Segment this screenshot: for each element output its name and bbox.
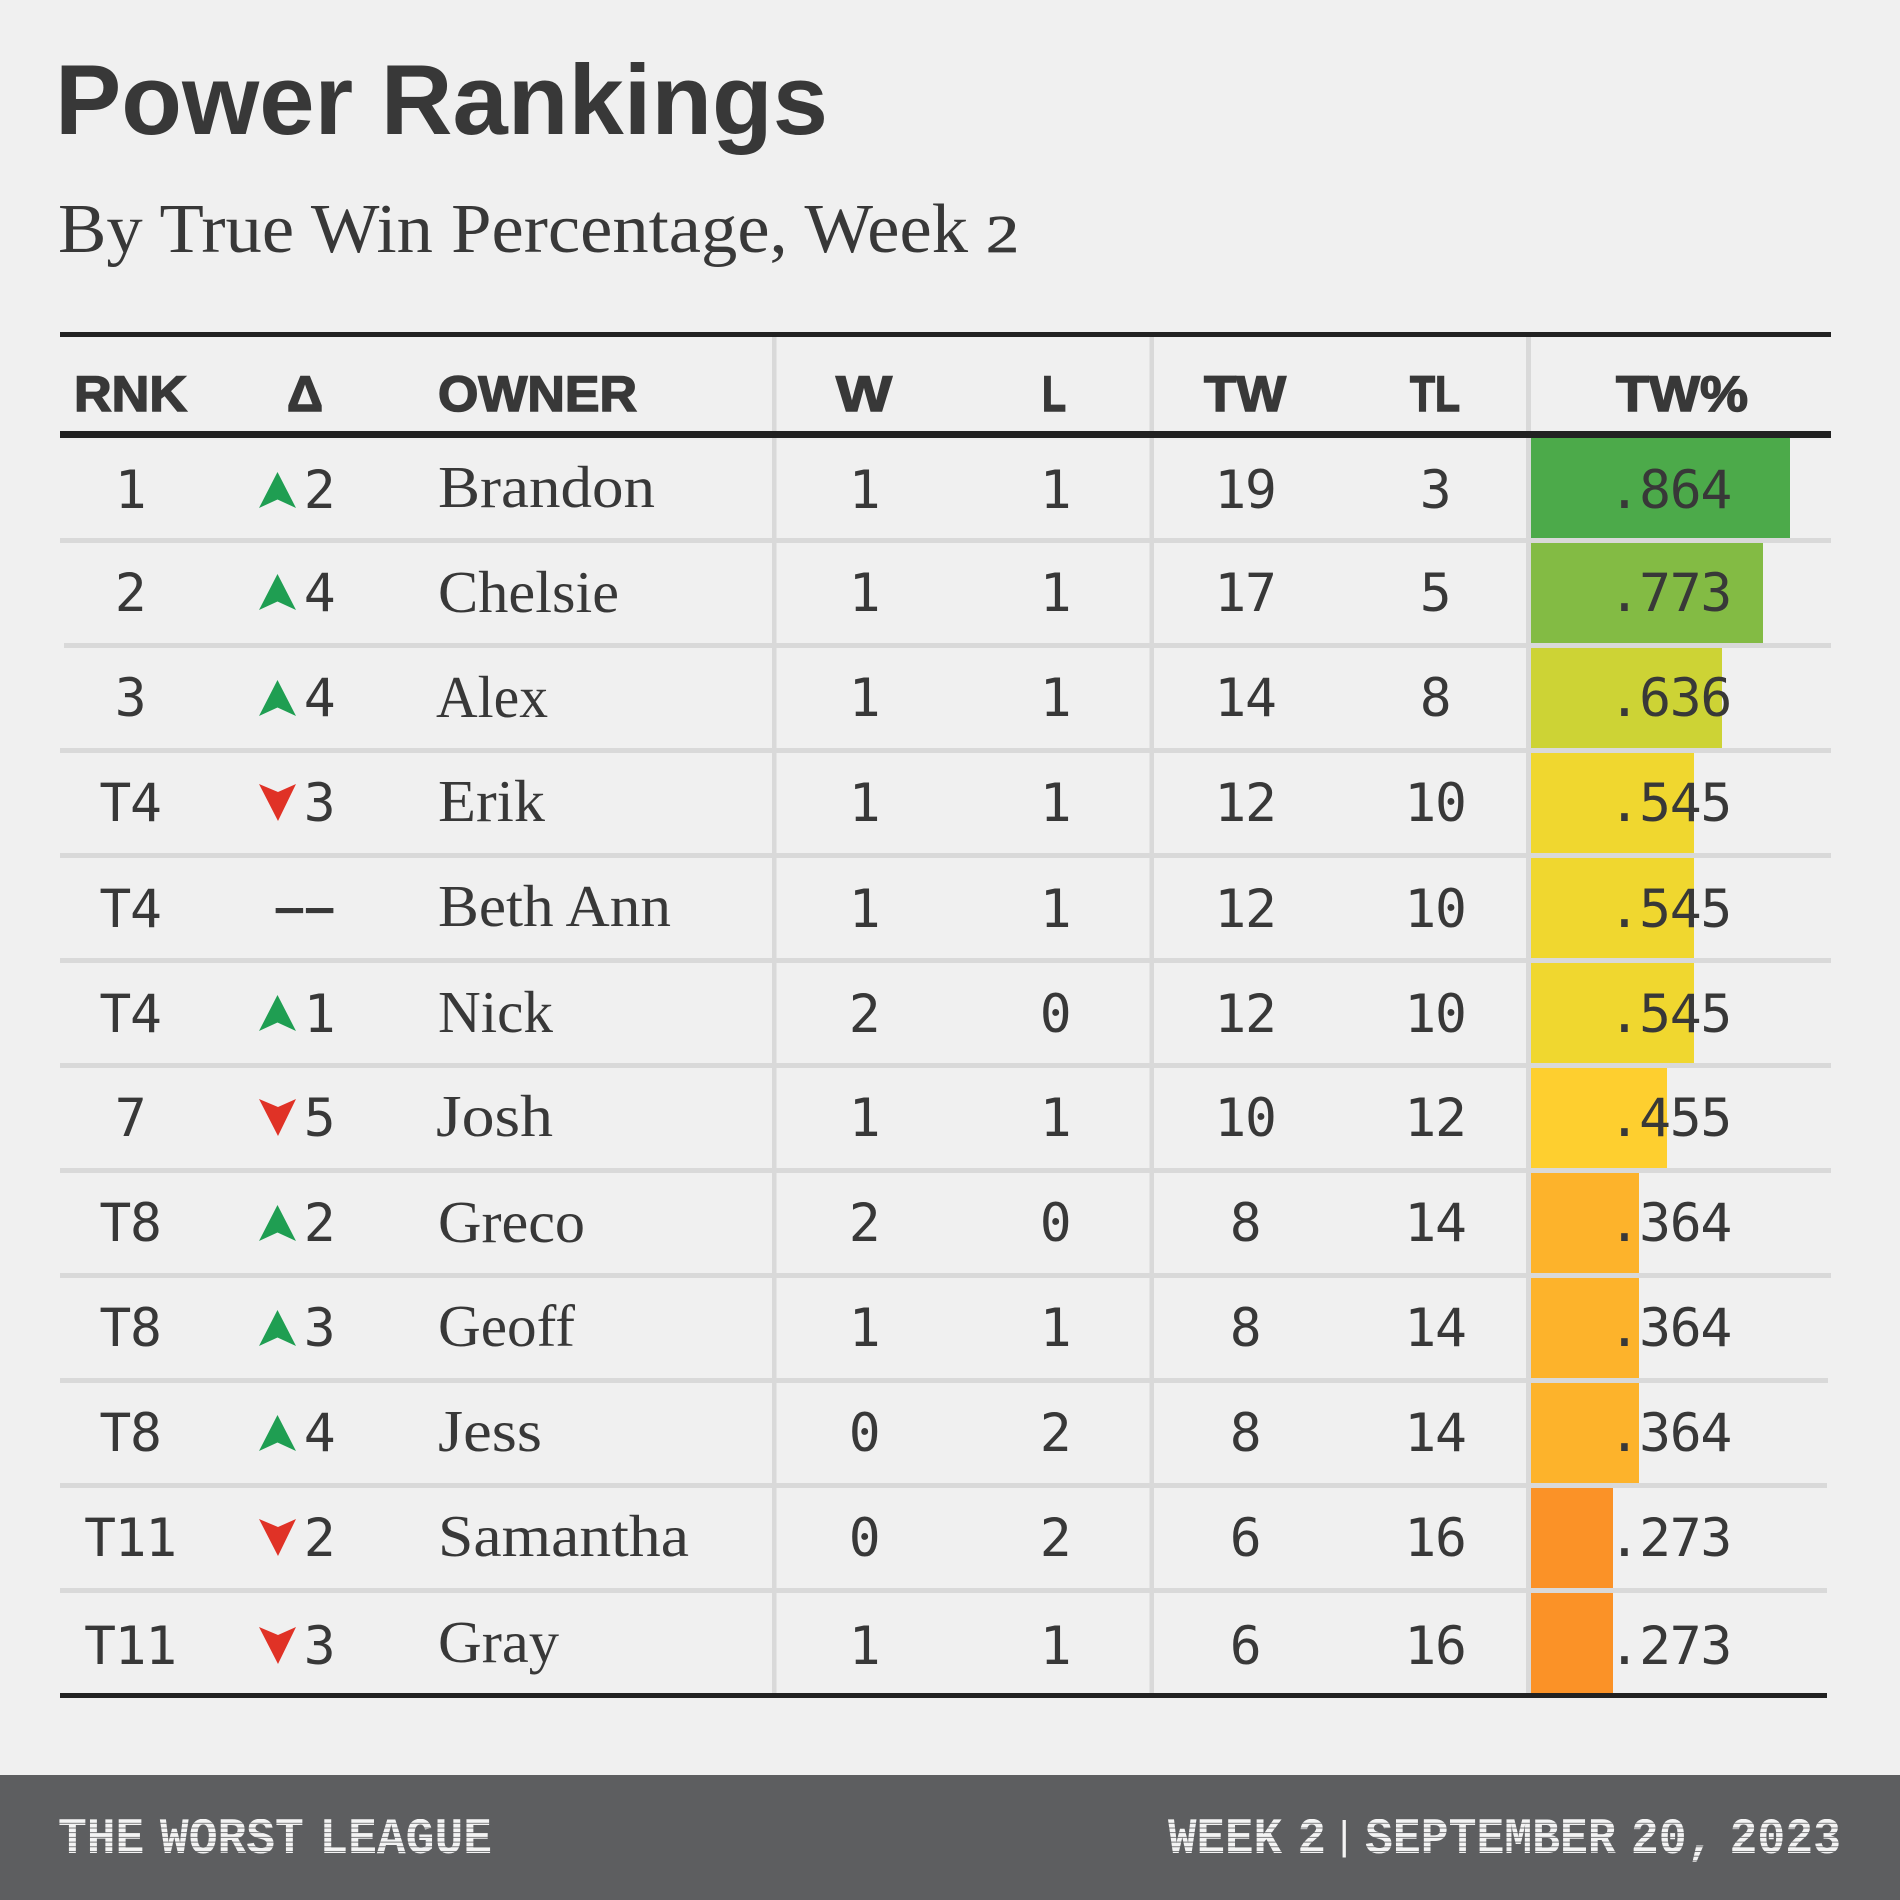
row: Samantha: Samantha: [438, 1503, 689, 1569]
row: Josh: 12: [1404, 1088, 1466, 1149]
row: Alex: 8: [1420, 668, 1450, 729]
footer: date: SEPTEMBER 20, 2023: [1365, 1812, 1841, 1869]
row: Erik: [99, 753, 1731, 853]
row: Erik: 1: [1040, 773, 1070, 834]
row: Alex: Alex: [436, 664, 548, 730]
header: L: L: [1042, 366, 1066, 422]
bar: .773: [1531, 543, 1763, 643]
bar: .364: [1531, 1278, 1639, 1378]
row: Geoff: 14: [1404, 1298, 1466, 1359]
header: TW%: TW%: [1616, 366, 1748, 422]
row: Brandon: [115, 438, 1790, 538]
row: Josh: 1: [1040, 1088, 1070, 1149]
row: Beth Ann: [99, 858, 1731, 958]
row: Samantha: 2: [304, 1508, 334, 1569]
row: Nick: 2: [849, 984, 879, 1045]
footer bar: [0, 1775, 1900, 1900]
footer: week: WEEK 2: [1168, 1812, 1326, 1869]
row: Josh: 7: [115, 1088, 145, 1149]
icon: down arrow: [259, 1099, 296, 1136]
row: Greco: .364: [1608, 1193, 1731, 1254]
row: Gray: T11: [84, 1616, 176, 1677]
row: Jess: T8: [99, 1403, 161, 1464]
row: Geoff: 1: [1040, 1298, 1070, 1359]
bar: .455: [1531, 1068, 1667, 1168]
row: Nick: 0: [1040, 984, 1070, 1045]
row: Samantha: 6: [1230, 1508, 1260, 1569]
bar: .364: [1531, 1383, 1639, 1483]
row: Geoff: 1: [849, 1298, 879, 1359]
row: Beth Ann: .545: [1608, 879, 1731, 940]
header: W: W: [836, 366, 893, 422]
row: Josh: .455: [1608, 1088, 1731, 1149]
row: Geoff: T8: [99, 1298, 161, 1359]
row: Jess: Jess: [438, 1398, 542, 1464]
row: Jess: 2: [1040, 1403, 1070, 1464]
row: Alex: [115, 648, 1731, 748]
row: Brandon: 1: [115, 460, 145, 521]
row: Brandon: 3: [1420, 460, 1450, 521]
row: Erik: 12: [1214, 773, 1276, 834]
icon: down arrow: [259, 784, 296, 821]
row: Greco: 2: [849, 1193, 879, 1254]
row: Samantha: [84, 1488, 1731, 1588]
row: Jess: .364: [1608, 1403, 1731, 1464]
row: Brandon: Brandon: [438, 454, 655, 520]
header: RNK: RNK: [74, 366, 187, 422]
row: Geoff: 3: [304, 1298, 334, 1359]
subtitle: 2: [986, 206, 1019, 264]
row: Erik: .545: [1608, 773, 1731, 834]
row: Jess: 8: [1230, 1403, 1260, 1464]
icon: up arrow: [259, 1205, 296, 1241]
header: TW: TW: [1204, 366, 1287, 422]
row: Beth Ann: 12: [1214, 879, 1276, 940]
row: Geoff: 8: [1230, 1298, 1260, 1359]
row: Nick: 1: [304, 984, 334, 1045]
row: Josh: 10: [1214, 1088, 1276, 1149]
row: Gray: [84, 1593, 1731, 1693]
row: Beth Ann: T4: [99, 879, 161, 940]
row: Greco: 14: [1404, 1193, 1466, 1254]
row: Geoff: Geoff: [438, 1293, 575, 1359]
row: Erik: Erik: [438, 768, 546, 834]
footer: divider glyph: |: [1339, 1814, 1349, 1858]
title: Power Rankings: [55, 44, 828, 155]
row: Gray: 6: [1230, 1616, 1260, 1677]
row: Chelsie: 17: [1214, 563, 1276, 624]
row: Nick: .545: [1608, 984, 1731, 1045]
bar: .545: [1531, 753, 1694, 853]
row: Beth Ann: 10: [1404, 879, 1466, 940]
row: Brandon: 1: [849, 460, 879, 521]
footer: league name: THE WORST LEAGUE: [58, 1812, 492, 1869]
bar: .545: [1531, 858, 1694, 958]
header: delta: Δ: [287, 366, 323, 422]
row: Chelsie: 5: [1420, 563, 1450, 624]
row: Erik: 3: [304, 773, 334, 834]
header: OWNER: OWNER: [438, 366, 637, 422]
row: Gray: 3: [304, 1616, 334, 1677]
row: Alex: 1: [1040, 668, 1070, 729]
row: Alex: 14: [1214, 668, 1276, 729]
row: Greco: [99, 1173, 1731, 1273]
row: Greco: 0: [1040, 1193, 1070, 1254]
row: Beth Ann: 1: [849, 879, 879, 940]
row: Beth Ann: 1: [1040, 879, 1070, 940]
row: Nick: Nick: [438, 979, 554, 1045]
row: Josh: Josh: [436, 1083, 553, 1149]
subtitle: By True Win Percentage, Week: [58, 191, 968, 268]
icon: down arrow: [259, 1627, 296, 1664]
row: Chelsie: Chelsie: [438, 559, 619, 625]
row: Jess: 4: [304, 1403, 334, 1464]
bar: .364: [1531, 1173, 1639, 1273]
bar: .273: [1531, 1593, 1613, 1693]
row: Josh: 1: [849, 1088, 879, 1149]
row: Gray: 1: [1040, 1616, 1070, 1677]
row: Samantha: 2: [1040, 1508, 1070, 1569]
row: Greco: 8: [1230, 1193, 1260, 1254]
row: Nick: [99, 963, 1731, 1063]
row: Nick: T4: [99, 984, 161, 1045]
icon: down arrow: [259, 1519, 296, 1556]
row: Brandon: 1: [1040, 460, 1070, 521]
bar: .545: [1531, 963, 1694, 1063]
row: Chelsie: 1: [1040, 563, 1070, 624]
icon: up arrow: [259, 574, 296, 610]
row: Nick: 10: [1404, 984, 1466, 1045]
row: Greco: 2: [304, 1193, 334, 1254]
row: Chelsie: 4: [304, 563, 334, 624]
row: Greco: Greco: [438, 1189, 585, 1255]
row: Gray: 1: [849, 1616, 879, 1677]
icon: up arrow: [259, 680, 296, 716]
row: Gray: .273: [1608, 1616, 1731, 1677]
row: Alex: .636: [1608, 668, 1731, 729]
icon: up arrow: [259, 1415, 296, 1451]
row: Chelsie: .773: [1608, 563, 1731, 624]
row: Erik: 1: [849, 773, 879, 834]
row: Greco: T8: [99, 1193, 161, 1254]
row: Samantha: 0: [849, 1508, 879, 1569]
row: Geoff: [99, 1278, 1731, 1378]
row: Samantha: .273: [1608, 1508, 1731, 1569]
row: Brandon: .864: [1608, 460, 1731, 521]
row: Jess: [99, 1383, 1731, 1483]
row: Erik: T4: [99, 773, 161, 834]
row: Geoff: .364: [1608, 1298, 1731, 1359]
bar: .273: [1531, 1488, 1613, 1588]
no change marker: ––: [277, 883, 337, 932]
row: Erik: 10: [1404, 773, 1466, 834]
row: Chelsie: 1: [849, 563, 879, 624]
table header row: [74, 366, 1748, 422]
row: Alex: 4: [304, 668, 334, 729]
row: Alex: 1: [849, 668, 879, 729]
row: Samantha: 16: [1404, 1508, 1466, 1569]
icon: up arrow: [259, 472, 296, 508]
row: Jess: 0: [849, 1403, 879, 1464]
row: Samantha: T11: [84, 1508, 176, 1569]
row: Josh: 5: [304, 1088, 334, 1149]
row: Chelsie: [115, 543, 1763, 643]
row: Brandon: 19: [1214, 460, 1276, 521]
row: Gray: 16: [1404, 1616, 1466, 1677]
row: Beth Ann: Beth Ann: [438, 873, 671, 939]
row: Jess: 14: [1404, 1403, 1466, 1464]
row: Brandon: 2: [304, 460, 334, 521]
icon: up arrow: [259, 1310, 296, 1346]
row: Josh: [115, 1068, 1731, 1168]
bar: .864: [1531, 438, 1790, 538]
row: Chelsie: 2: [115, 563, 145, 624]
icon: up arrow: [259, 995, 296, 1031]
bar: .636: [1531, 648, 1722, 748]
row: Nick: 12: [1214, 984, 1276, 1045]
row: Gray: Gray: [438, 1609, 560, 1675]
row: Alex: 3: [115, 668, 145, 729]
header: TL: TL: [1410, 366, 1460, 422]
